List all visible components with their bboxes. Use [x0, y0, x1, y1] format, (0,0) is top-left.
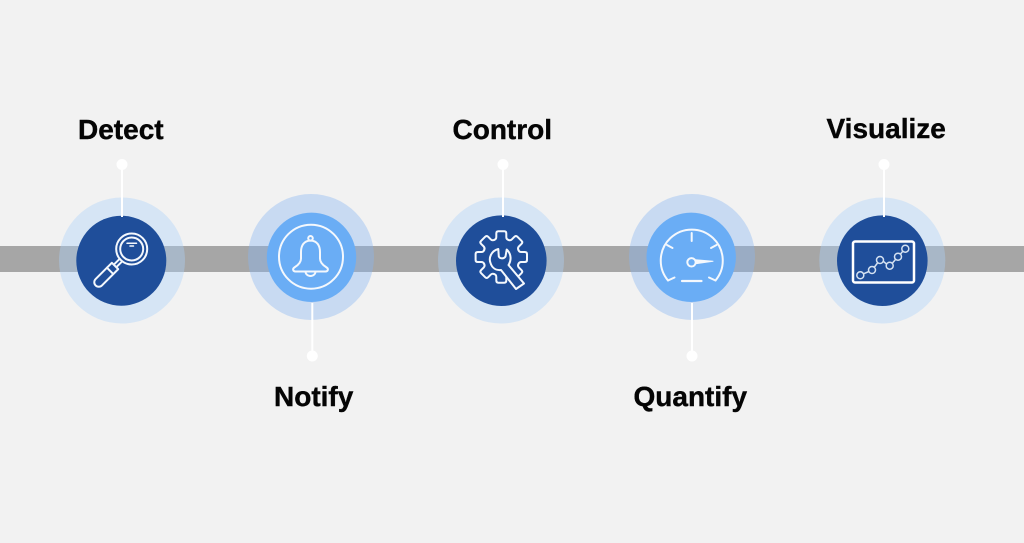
outer ring: Control [438, 198, 564, 324]
inner circle: Notify [267, 213, 356, 302]
connector: Notify [307, 303, 318, 362]
inner circle: Control [456, 215, 547, 306]
icon: speedometer gauge [661, 230, 723, 281]
inner circle: Quantify [646, 213, 736, 302]
label: Control: Control [452, 114, 552, 145]
connector: Control [498, 159, 508, 217]
outer ring: Notify [248, 194, 374, 320]
outer ring: Visualize [819, 198, 945, 324]
connector: Visualize [878, 159, 890, 217]
icon: line chart on screen [853, 242, 914, 282]
step: Notify [248, 194, 374, 412]
step: Control [438, 114, 564, 324]
label: Notify: Notify [274, 381, 354, 412]
step: Quantify [629, 194, 755, 412]
inner circle: Detect [76, 216, 166, 306]
timeline bar [0, 246, 1024, 272]
icon: gear and wrench [476, 231, 527, 289]
label: Detect: Detect [78, 114, 164, 145]
label: Visualize: Visualize [826, 113, 946, 144]
connector: Detect [116, 159, 128, 217]
label: Quantify: Quantify [634, 381, 747, 412]
step: Visualize [819, 113, 946, 324]
outer ring: Quantify [629, 194, 755, 320]
icon: magnifying glass [92, 234, 147, 289]
connector: Quantify [686, 303, 698, 362]
outer ring: Detect [59, 198, 185, 324]
icon: bell [279, 225, 343, 289]
inner circle: Visualize [837, 215, 928, 306]
step: Detect [59, 114, 185, 324]
